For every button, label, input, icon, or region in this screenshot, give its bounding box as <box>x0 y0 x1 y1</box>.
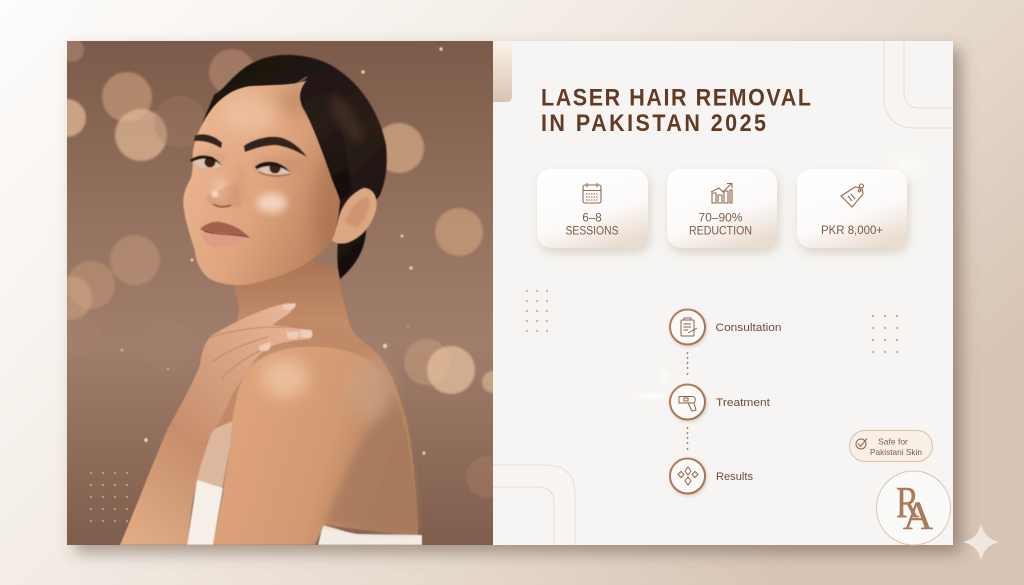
icon: sparkles <box>678 467 698 485</box>
hand <box>167 303 313 444</box>
icon: growth chart <box>711 184 732 203</box>
badge: safe for Pakistani skin: Safe for <box>878 436 908 446</box>
process steps <box>620 310 782 494</box>
eyebrows <box>194 134 222 148</box>
connector dots <box>687 352 688 450</box>
eyes <box>190 156 291 176</box>
icon: calendar <box>583 183 601 203</box>
icon: price tag <box>841 184 864 207</box>
title <box>541 83 811 136</box>
stat text: PKR 8,000+ <box>821 225 883 237</box>
badge: safe for Pakistani skin <box>850 430 932 462</box>
stat text: REDUCTION <box>689 226 752 238</box>
title: LASER HAIR REMOVAL <box>541 83 811 111</box>
title: IN PAKISTAN 2025 <box>541 109 766 136</box>
ear <box>331 188 377 244</box>
decorative corner tab <box>493 41 512 102</box>
stat text: 70–90% <box>698 212 742 224</box>
neck <box>234 260 342 307</box>
icon: large sparkle <box>962 524 1000 560</box>
stat text: 6–8 <box>582 212 602 224</box>
dot grid upper <box>526 290 548 332</box>
bokeh circles <box>48 38 508 498</box>
main card <box>48 38 953 545</box>
forearm <box>120 428 206 545</box>
step: consultation <box>670 310 782 344</box>
hair sheen <box>328 94 363 142</box>
photo panel: woman with bokeh background <box>48 38 508 545</box>
stat card: reduction <box>667 169 777 248</box>
step: treatment: Treatment <box>716 397 770 409</box>
decorative corner lines bottom left <box>493 465 575 545</box>
icon: clipboard <box>681 318 697 336</box>
nose <box>208 184 238 206</box>
body: torso, arm and dress <box>120 255 422 545</box>
decorative corner lines top right <box>884 41 953 128</box>
hair bun and hair <box>202 55 387 279</box>
hair front strands over forehead edge <box>202 70 352 200</box>
step: results <box>670 458 753 494</box>
right content panel <box>493 41 953 545</box>
stat card: sessions <box>537 169 648 248</box>
chest between arms <box>196 420 235 488</box>
hair parting line <box>293 77 307 86</box>
logo: RA monogram: A <box>903 493 933 538</box>
stat card: price <box>797 169 907 248</box>
torso and back <box>200 304 418 535</box>
face <box>183 80 350 285</box>
stat text <box>566 212 619 238</box>
logo: RA monogram <box>876 471 950 545</box>
dot grid right <box>872 315 898 353</box>
light flare on treatment step <box>620 363 680 403</box>
lips <box>200 222 249 247</box>
step: results: Results <box>716 471 753 483</box>
dot grid <box>90 472 128 522</box>
logo: RA monogram: R <box>896 478 920 527</box>
stat text: SESSIONS <box>566 226 619 238</box>
sparkle dots <box>120 47 443 455</box>
badge: safe for Pakistani skin: Pakistani Skin <box>870 447 922 457</box>
light flare near price card <box>873 143 937 187</box>
stat text <box>689 212 752 238</box>
icon: check mark <box>856 438 867 449</box>
upper arm <box>213 347 418 545</box>
dress <box>187 480 422 545</box>
step: consultation: Consultation <box>716 322 782 334</box>
icon: laser device <box>679 396 696 411</box>
step: treatment <box>670 384 770 420</box>
